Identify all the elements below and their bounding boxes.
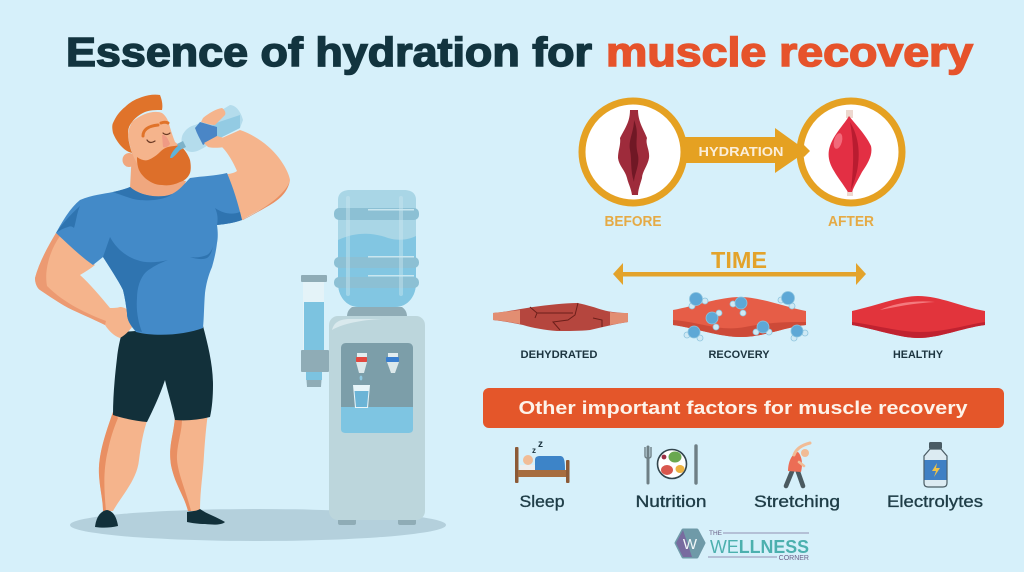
man drinking water xyxy=(35,95,290,528)
shirt xyxy=(56,173,242,335)
stretching label: Stretching xyxy=(754,493,840,511)
cold tap xyxy=(386,353,399,373)
icon: sleep xyxy=(515,439,570,483)
logo: the wellness corner xyxy=(676,530,809,562)
sleep label: Sleep xyxy=(520,493,564,511)
fingers xyxy=(201,108,225,125)
water cooler xyxy=(301,190,425,525)
before circle xyxy=(582,101,684,203)
logo: the wellness corner: WELLNESS xyxy=(710,537,809,557)
logo: the wellness corner: W xyxy=(683,536,698,553)
water molecules xyxy=(684,292,808,341)
water bottle xyxy=(334,190,419,307)
icon: nutrition xyxy=(645,446,696,483)
shoes xyxy=(95,509,225,528)
banner: other factors: Other important factors for muscle recovery xyxy=(518,398,968,418)
before muscle xyxy=(618,110,649,195)
electrolytes label: Electrolytes xyxy=(887,493,983,511)
logo: the wellness corner: THE xyxy=(709,530,723,537)
left arm shade xyxy=(35,233,106,325)
beard xyxy=(137,145,191,185)
control panel xyxy=(341,343,413,433)
icon: sleep: z xyxy=(532,446,536,455)
icon: electrolytes xyxy=(924,442,947,487)
highlight xyxy=(332,319,382,330)
title: muscle recovery xyxy=(606,29,973,75)
hot tap xyxy=(356,353,367,373)
nutrition label: Nutrition xyxy=(636,493,706,511)
shirt shading xyxy=(56,187,242,332)
recovery label: RECOVERY xyxy=(708,349,770,361)
eyebrows xyxy=(143,122,168,136)
title xyxy=(66,29,973,75)
bottle body xyxy=(182,105,243,152)
water bottle xyxy=(170,105,243,158)
healthy muscle xyxy=(852,296,985,338)
healthy label: HEALTHY xyxy=(893,349,944,361)
ear xyxy=(122,153,136,167)
arrow: hydration: HYDRATION xyxy=(698,144,784,159)
recovery muscle xyxy=(673,292,808,341)
head xyxy=(112,95,191,185)
face xyxy=(128,112,180,170)
icon: stretching xyxy=(786,443,810,486)
left arm with hand on hip xyxy=(35,233,135,338)
right arm shade xyxy=(242,180,290,220)
water stream xyxy=(170,145,181,158)
right arm xyxy=(208,130,290,220)
hydration before and after diagram xyxy=(582,101,902,230)
feet xyxy=(338,518,356,525)
shorts xyxy=(113,326,213,422)
title: Essence of hydration for xyxy=(66,29,592,75)
banner: other factors xyxy=(483,388,1004,428)
cooler body xyxy=(329,316,425,520)
after circle xyxy=(800,101,902,203)
after muscle xyxy=(829,110,871,196)
dehydrated muscle xyxy=(493,303,628,331)
label xyxy=(195,122,217,145)
time arrow xyxy=(613,247,866,285)
cup dispenser xyxy=(301,275,329,387)
logo: the wellness corner: CORNER xyxy=(779,555,809,562)
cap xyxy=(177,141,186,150)
drop xyxy=(360,376,362,380)
lower fingers xyxy=(204,136,224,148)
arrow: hydration xyxy=(683,128,807,173)
legs xyxy=(99,412,208,511)
hair xyxy=(112,95,162,153)
time arrow: TIME xyxy=(711,247,767,273)
collar xyxy=(347,307,407,317)
nose shade xyxy=(162,135,170,147)
neck xyxy=(130,150,186,197)
after label: AFTER xyxy=(828,214,874,230)
glass xyxy=(353,385,370,408)
icon: sleep: z xyxy=(538,439,543,450)
dehydrated label: DEHYDRATED xyxy=(520,349,598,361)
before label: BEFORE xyxy=(604,214,662,230)
closed eyes xyxy=(147,133,170,142)
floor shadow xyxy=(70,509,446,541)
